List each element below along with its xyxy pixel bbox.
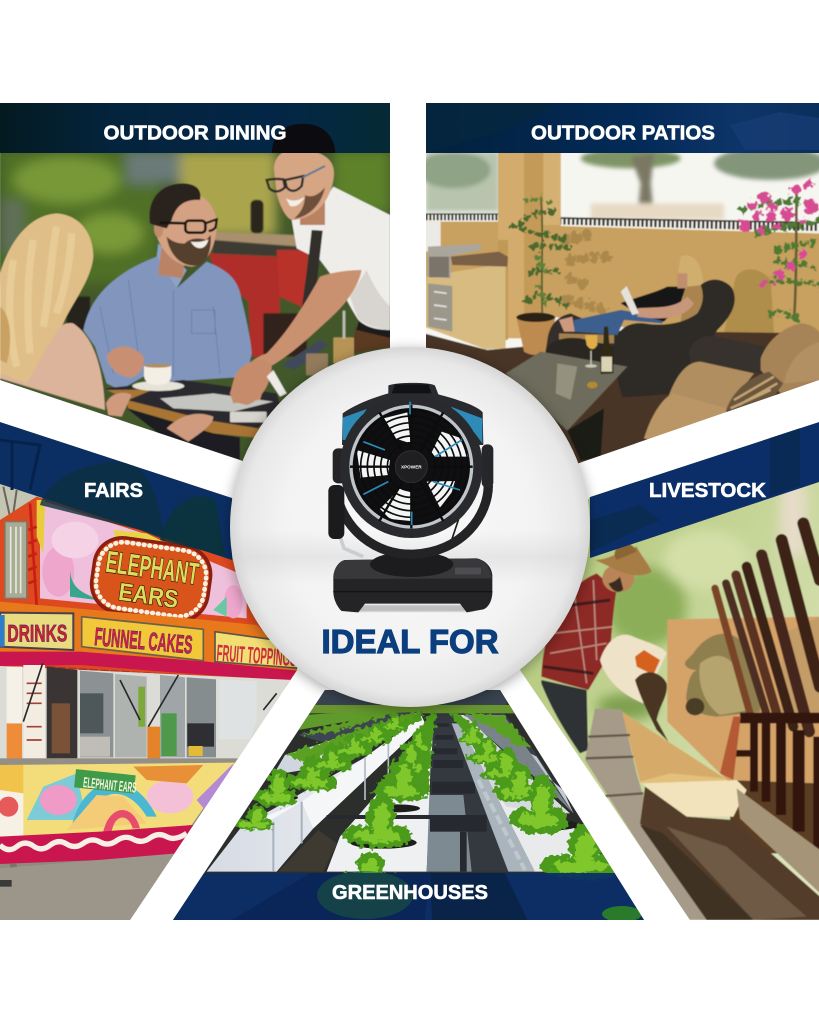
banner: outdoor dining: [0, 103, 390, 153]
centre disc: [229, 347, 591, 711]
waiter glasses and beard: [267, 166, 325, 219]
yoke: [335, 485, 488, 554]
banner: outdoor patios: [426, 103, 819, 153]
central walkway: [427, 713, 510, 872]
left gutter: [207, 717, 425, 872]
panel: outdoor dining: [0, 153, 390, 461]
panel: fairs: DRINKS: [7, 620, 67, 647]
Elephant Ears oval: ELEPHANT: [104, 545, 201, 592]
panel: outdoor patios: [426, 153, 819, 464]
awning: [0, 652, 297, 681]
outdoor kitchen: [424, 222, 508, 349]
window wall: [0, 666, 293, 763]
banner: fairs: [0, 422, 232, 560]
farmer: [541, 543, 668, 753]
panel: livestock: [520, 420, 819, 920]
reclining woman and wicker chair: [546, 255, 735, 397]
leaf shadows on wall: [564, 233, 607, 310]
scalloped skirt: [0, 825, 193, 864]
seated man: [83, 183, 252, 390]
red roof: [0, 497, 300, 687]
panel: fairs: FRUIT TOPPINGS: [216, 640, 297, 671]
hub: [395, 451, 427, 483]
gravel and rails: [278, 830, 337, 872]
railing: [426, 214, 498, 222]
centre gutter: [327, 713, 437, 872]
wall: [426, 152, 819, 340]
far rows: [298, 712, 423, 743]
top housing and handle: [342, 383, 483, 445]
trough: [641, 773, 728, 784]
banner: livestock: [590, 422, 819, 558]
glass table, wine glass and bottle: [506, 327, 627, 461]
background table and chairs: [67, 200, 308, 357]
heading: ideal for: IDEAL FOR: [322, 623, 499, 660]
lettuce pots: [254, 794, 590, 873]
pavement: [0, 853, 177, 920]
side sign: [5, 522, 27, 598]
elephant mural: [40, 500, 247, 618]
waiter: [230, 149, 392, 405]
wood board: [667, 617, 819, 783]
floor: [424, 330, 819, 473]
label: livestock: LIVESTOCK: [649, 479, 766, 502]
label: fairs: FAIRS: [84, 479, 143, 502]
label: outdoor patios: OUTDOOR PATIOS: [531, 122, 715, 144]
stanchion bars: [715, 523, 819, 732]
panel: fairs: ELEPHANT EARS: [82, 775, 137, 797]
panel: fairs: FUNNEL CAKES: [93, 623, 194, 660]
Elephant Ears oval: [90, 536, 212, 619]
right gutters: [453, 715, 617, 872]
base: [333, 558, 492, 612]
power cord and plug: [341, 538, 363, 557]
label: outdoor dining: OUTDOOR DINING: [104, 122, 286, 144]
turntable: [370, 552, 453, 577]
white blade gaps: [357, 412, 468, 521]
icon: XPOWER fan: [328, 383, 493, 612]
lettuce rows: [231, 710, 620, 890]
orange beam: [0, 602, 300, 677]
panel: greenhouses: [170, 680, 650, 927]
Elephant Ears oval: EARS: [117, 579, 180, 614]
sofa: [644, 323, 819, 440]
logo: XPOWER: [401, 465, 422, 471]
fan ring: [345, 400, 478, 533]
signs: [0, 613, 73, 650]
panel: fairs: [0, 420, 320, 920]
label: greenhouses: GREENHOUSES: [332, 881, 488, 904]
blonde woman: [0, 213, 105, 410]
table with cup and hands: [105, 364, 293, 460]
bougainvillea tree: [739, 180, 819, 323]
potted plant: [514, 197, 574, 355]
cow: [780, 617, 819, 732]
banner: greenhouses: [170, 871, 650, 922]
base shadow: [350, 605, 473, 612]
grill: [350, 405, 473, 528]
painted mural: [0, 763, 235, 837]
